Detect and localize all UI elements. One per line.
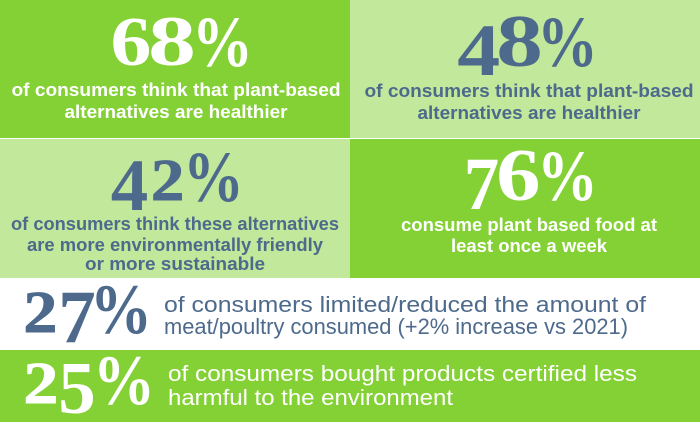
panel: 68% healthier [0, 0, 350, 138]
text: 25% description: harmful to the environment [168, 385, 453, 410]
text: 76% description: consume plant based food at [401, 215, 657, 235]
text: 42% description: are more environmentally friendly [27, 235, 323, 255]
statistic: 48%: 4 [457, 10, 500, 92]
statistic: 68% [110, 2, 253, 82]
text: 68% description: of consumers think that plant-based [12, 80, 341, 100]
text: 27% description: meat/poultry consumed (+2% increase vs 2021) [164, 314, 628, 339]
statistic: 25% [23, 341, 155, 422]
statistic: 42%: 2 [151, 147, 184, 213]
statistic: 25%: % [93, 341, 155, 420]
text: 42% description: or more sustainable [85, 254, 265, 274]
statistic: 76% [464, 134, 598, 225]
statistic: 48%: 8 [496, 1, 543, 83]
panel: 76% weekly [350, 134, 700, 278]
panel: 48% healthier [350, 0, 700, 138]
statistic: 27%: 7 [58, 276, 96, 359]
statistic: 25%: 2 [23, 351, 58, 417]
text: 76% description: least once a week [451, 236, 608, 256]
statistic: 76%: 6 [496, 134, 541, 216]
text: 48% description: of consumers think that plant-based [364, 81, 694, 101]
statistic: 76%: % [537, 137, 598, 216]
statistic: 42%: 4 [111, 145, 148, 227]
text: 42% description: of consumers think these alternatives [11, 214, 339, 234]
panel: 42% environmentally friendly [0, 138, 350, 278]
panel: 25% certified products [0, 341, 700, 422]
statistic: 42% [111, 138, 244, 227]
statistic: 27%: 2 [23, 279, 57, 345]
statistic: 27% [23, 270, 152, 359]
statistic: 68%: % [192, 3, 253, 82]
text: 27% description: of consumers limited/reduced the amount of [164, 292, 647, 317]
text: 68% description: alternatives are healthier [64, 102, 288, 122]
panel: 27% reduced meat [0, 270, 700, 359]
statistic: 68%: 8 [148, 2, 196, 81]
statistic: 48%: % [537, 3, 598, 82]
statistic: 48% [457, 1, 598, 92]
statistic: 27%: % [90, 270, 152, 349]
text: 48% description: alternatives are healthier [418, 103, 640, 123]
statistic: 68%: 6 [110, 3, 151, 81]
statistic: 76%: 7 [464, 142, 499, 225]
text: 25% description: of consumers bought products certified less [168, 361, 637, 386]
statistic: 42%: % [183, 138, 244, 217]
